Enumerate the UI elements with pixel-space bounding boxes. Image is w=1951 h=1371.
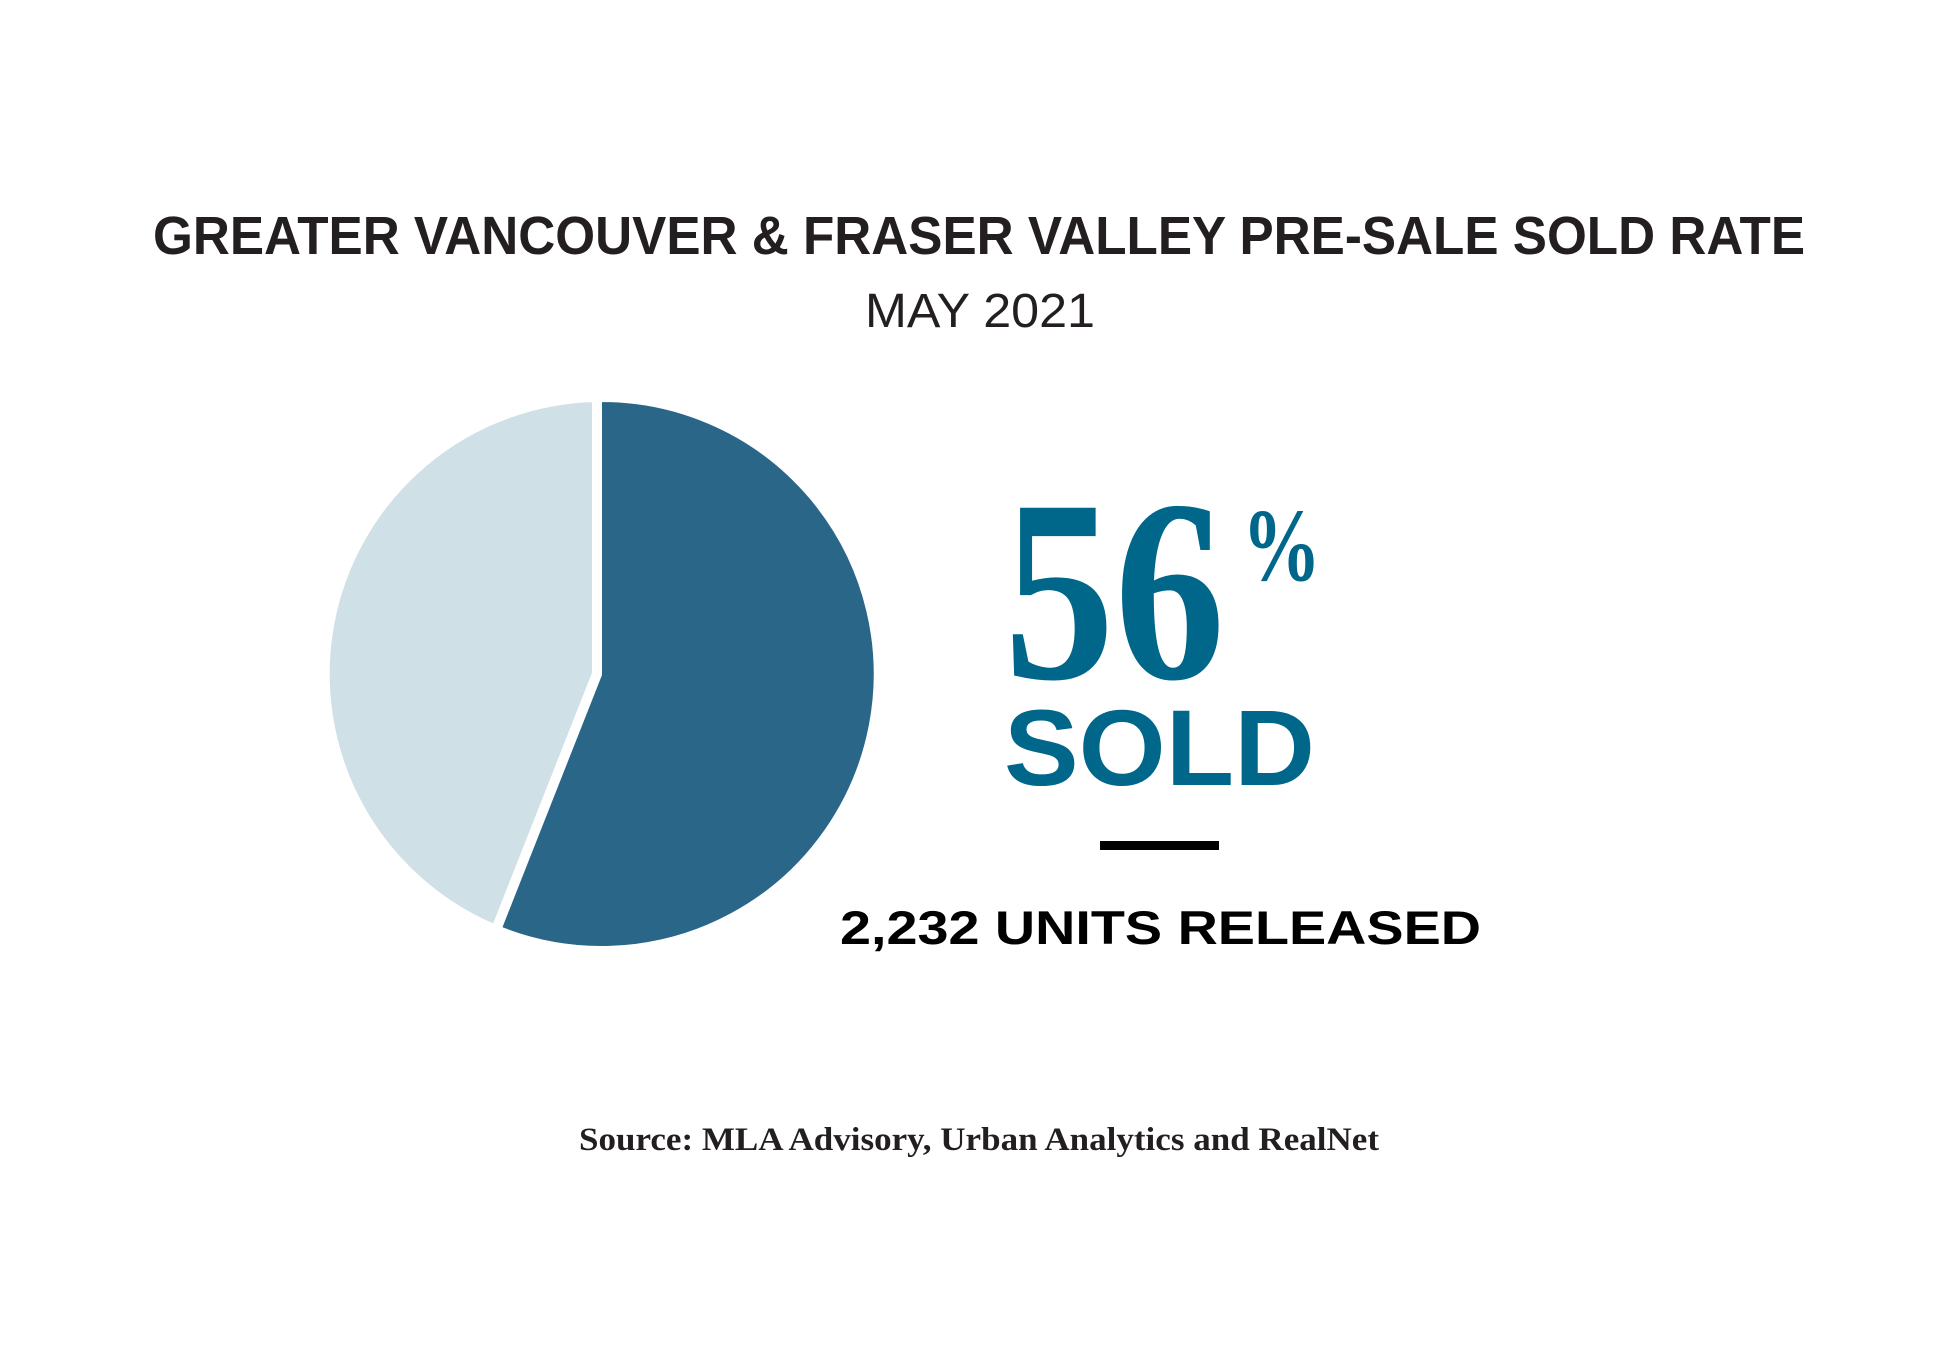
subtitle: MAY 2021: [865, 285, 1095, 338]
big stat 56%: %: [1242, 488, 1321, 603]
source: Source: MLA Advisory, Urban Analytics and RealNet: [579, 1122, 1379, 1158]
pie chart: [325, 397, 879, 951]
SOLD label: SOLD: [1004, 687, 1315, 808]
slice: unsold: [325, 397, 597, 930]
units released: 2,232 UNITS RELEASED: [840, 901, 1481, 954]
big stat 56%: 56: [1004, 447, 1225, 735]
title: GREATER VANCOUVER & FRASER VALLEY PRE-SALE SOLD RATE: [153, 206, 1805, 266]
divider line: [1100, 841, 1219, 850]
slice: sold 56%: [496, 397, 879, 951]
